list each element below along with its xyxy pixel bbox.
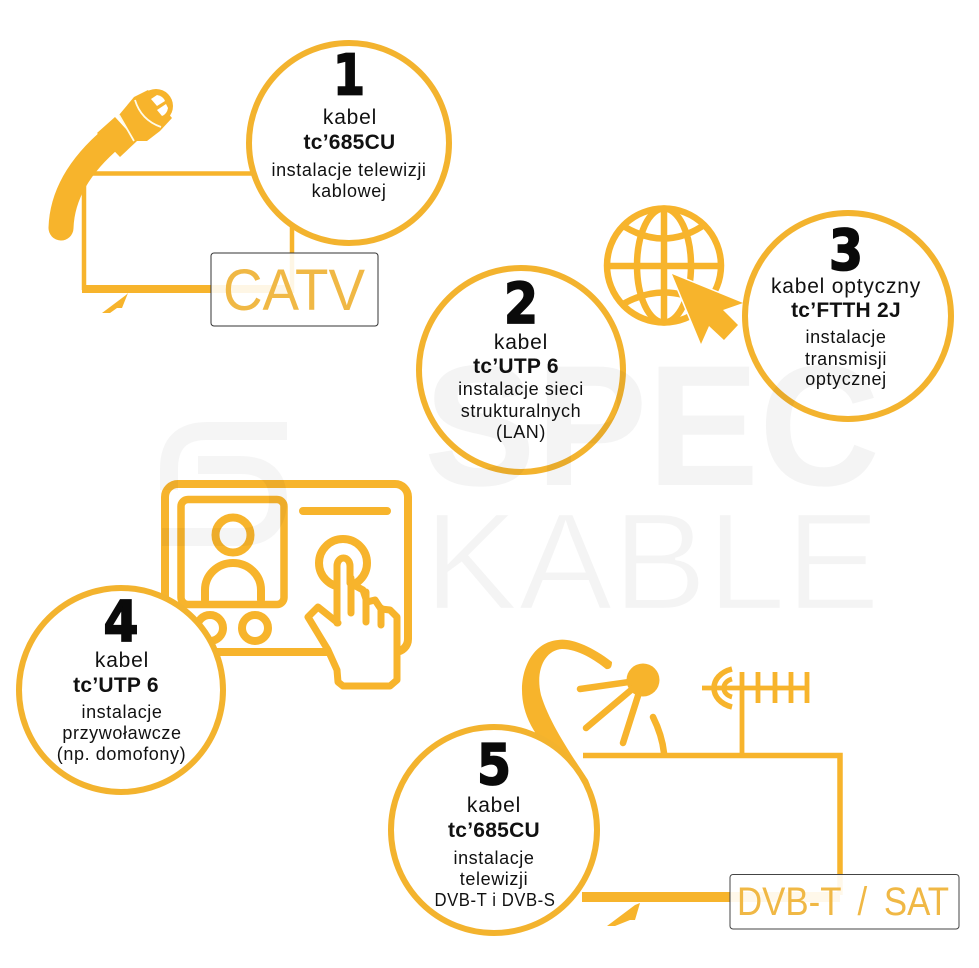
panel: intercom	[19, 484, 408, 792]
circle 2: tc’UTP 6	[473, 355, 559, 378]
circle 4	[19, 588, 223, 792]
icon: mouse cursor	[672, 274, 743, 344]
circle 2: 2	[504, 272, 538, 337]
icon: globe	[607, 208, 721, 322]
circle 2: (LAN)	[496, 422, 546, 442]
circle 4: tc’UTP 6	[73, 674, 159, 697]
circle 5: instalacje	[453, 848, 535, 868]
circle 1: kabel	[323, 106, 377, 129]
circle 5: kabel	[467, 794, 521, 817]
icon: television outline	[82, 174, 294, 313]
circle 3	[745, 213, 951, 419]
circle 3: transmisji	[805, 349, 887, 369]
circle 3: optycznej	[805, 369, 887, 389]
circle 5	[391, 727, 597, 933]
icon: coaxial cable plug	[61, 89, 173, 228]
circle 5: tc’685CU	[448, 819, 540, 842]
watermark: SPEC KABLE logo: KABLE	[424, 485, 880, 639]
circle 3: kabel optyczny	[771, 275, 921, 298]
circle 4: przywoławcze	[62, 723, 182, 743]
icon: pressing hand	[308, 558, 397, 686]
circle 2: kabel	[494, 331, 548, 354]
circle 4: 4	[104, 590, 138, 655]
icon: intercom panel	[165, 484, 408, 652]
circle 3: 3	[829, 218, 863, 284]
circle 5: 5	[477, 733, 511, 798]
watermark: SPEC KABLE logo	[162, 330, 880, 639]
icon: television outline	[582, 756, 840, 926]
circle 3: tc’FTTH 2J	[791, 299, 901, 322]
circle 1	[249, 43, 449, 243]
circle 5: telewizji	[460, 869, 528, 889]
circle 4: instalacje	[81, 702, 163, 722]
circle 2: instalacje sieci	[458, 379, 584, 399]
circle 1: 1	[333, 44, 365, 108]
circle 4: kabel	[95, 649, 149, 672]
panel: LAN cable	[419, 268, 623, 472]
icon: TV antenna	[702, 669, 809, 755]
circle 4: (np. domofony)	[57, 744, 186, 764]
label: DVB-T / SAT: DVB-T / SAT	[737, 880, 949, 924]
circle 2	[419, 268, 623, 472]
panel: fibre optic cable	[607, 208, 951, 419]
panel: CATV television and coaxial plug	[61, 43, 449, 326]
circle 3: instalacje	[805, 327, 887, 347]
circle 5: DVB-T i DVB-S	[434, 890, 556, 910]
watermark: SPEC KABLE logo: SPEC	[424, 330, 880, 522]
circle 2: strukturalnych	[461, 401, 581, 421]
circle 1: kablowej	[312, 181, 386, 201]
panel: terrestrial and satellite TV	[391, 640, 959, 933]
circle 1: tc’685CU	[304, 131, 395, 154]
circle 1: instalacje telewizji	[271, 160, 427, 180]
icon: satellite dish	[522, 640, 664, 785]
label: CATV: CATV	[223, 258, 365, 323]
